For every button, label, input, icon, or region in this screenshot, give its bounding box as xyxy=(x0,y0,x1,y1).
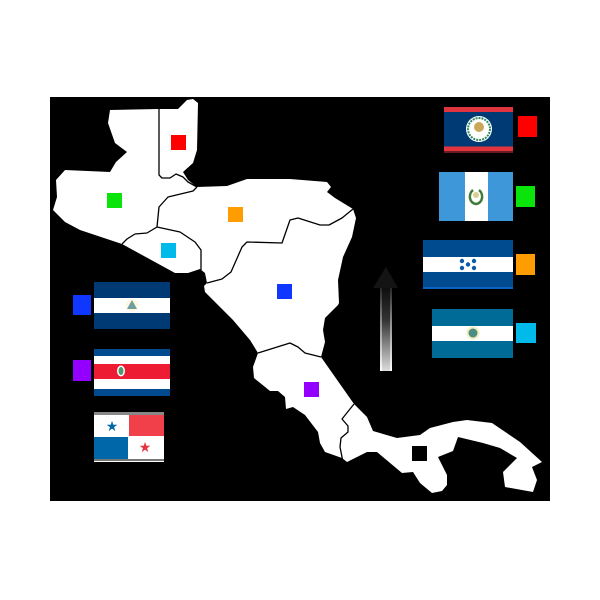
border: El Salvador and Honduras xyxy=(157,227,201,270)
legend square: Belize xyxy=(518,116,537,137)
marker: Guatemala xyxy=(107,193,122,208)
legend square: Nicaragua xyxy=(73,295,91,315)
legend square: Costa Rica xyxy=(73,360,91,381)
border: Guatemala and El Salvador xyxy=(122,227,157,244)
legend square: Honduras xyxy=(516,254,535,275)
flag: El Salvador xyxy=(432,309,513,358)
flag: Honduras xyxy=(423,240,513,289)
map: Central America countries xyxy=(53,99,542,493)
flag: Panama: ★ xyxy=(106,419,118,435)
border: Honduras and Nicaragua xyxy=(207,209,353,283)
border: Guatemala and Honduras xyxy=(157,187,197,227)
arrow: north arrow xyxy=(373,267,398,371)
border: Costa Rica and Panama xyxy=(340,404,354,462)
marker: Nicaragua xyxy=(277,284,292,299)
legend square: Guatemala xyxy=(516,186,535,207)
flag: Nicaragua xyxy=(94,282,170,329)
panel: black background xyxy=(50,97,550,501)
border: Guatemala and Belize xyxy=(159,109,197,187)
marker: Belize xyxy=(171,135,186,150)
marker: Honduras xyxy=(228,207,243,222)
marker: El Salvador xyxy=(161,243,176,258)
flag: Panama: ★ xyxy=(139,440,151,456)
legend square: El Salvador xyxy=(516,323,536,343)
flag: Belize xyxy=(444,107,513,153)
flag: Panama xyxy=(94,412,164,462)
marker: Panama xyxy=(412,446,427,461)
marker: Costa Rica xyxy=(304,382,319,397)
flag: Guatemala xyxy=(439,172,513,221)
flag: Costa Rica xyxy=(94,349,170,396)
border: Nicaragua and Costa Rica xyxy=(258,343,321,357)
